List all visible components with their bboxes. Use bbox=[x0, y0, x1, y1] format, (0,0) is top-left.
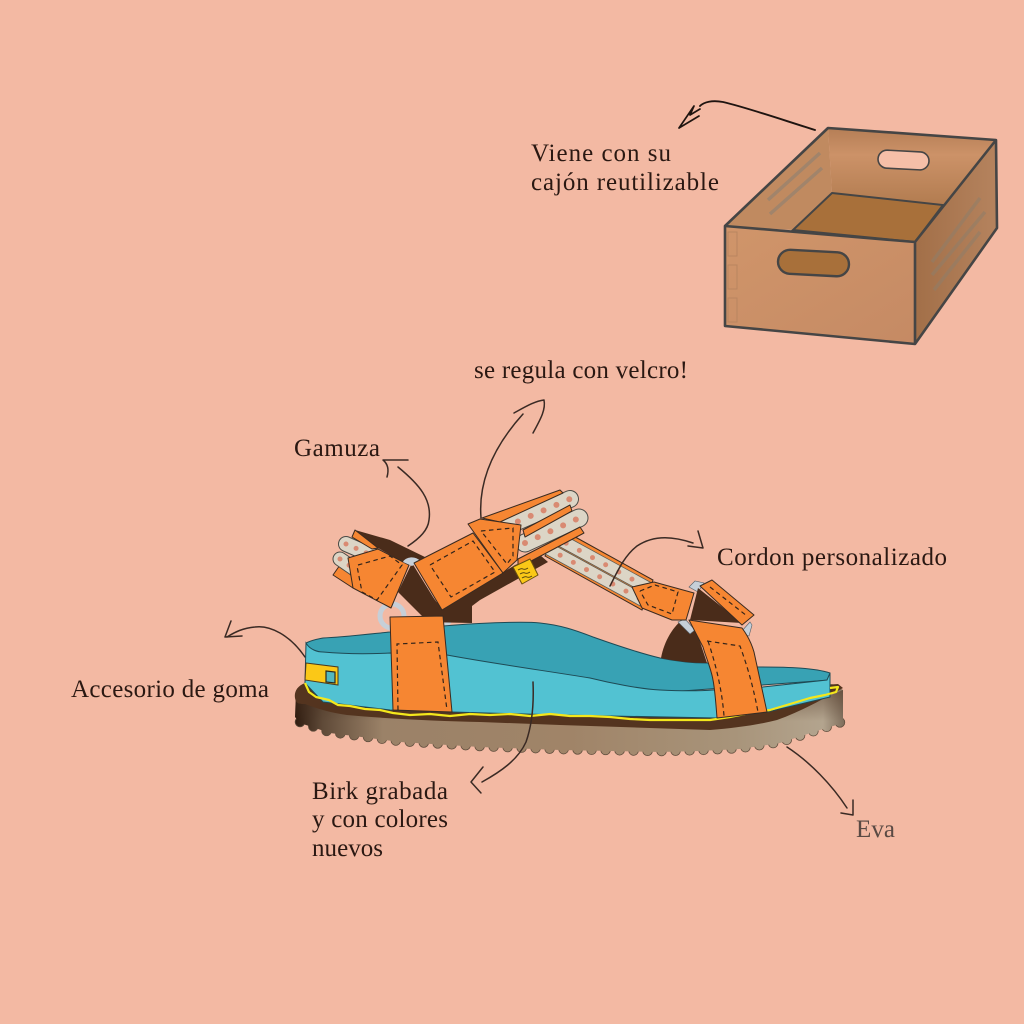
footbed bbox=[306, 622, 830, 700]
top velcro pad bbox=[468, 519, 521, 573]
front rings bbox=[678, 581, 752, 636]
crate joints bbox=[728, 232, 737, 322]
crate left inner wall bbox=[725, 128, 832, 230]
label: eva: Eva bbox=[856, 816, 895, 843]
crate front bbox=[725, 226, 915, 344]
crate front handle hole bbox=[777, 249, 850, 277]
label: birk bbox=[312, 778, 448, 862]
yellow stitch bbox=[305, 683, 838, 720]
dark straps bbox=[355, 530, 427, 565]
label: velcro: se regula con velcro! bbox=[474, 357, 688, 384]
heel strap bbox=[390, 616, 452, 712]
arrow: eva bbox=[787, 747, 853, 815]
arrow: birk bbox=[471, 682, 533, 793]
center ring bbox=[403, 557, 420, 566]
midsole bbox=[305, 643, 830, 718]
label: accesorio: Accesorio de goma bbox=[71, 676, 269, 703]
label: birk: Birk grabada bbox=[312, 778, 448, 805]
front dark arch bbox=[661, 620, 707, 663]
sole bbox=[295, 683, 843, 752]
arrow: cordon bbox=[610, 531, 703, 586]
front cords bbox=[545, 533, 653, 610]
sole teeth bbox=[300, 722, 841, 751]
crate right side bbox=[915, 140, 997, 344]
label: gamuza: Gamuza bbox=[294, 435, 380, 462]
crate outline bbox=[725, 128, 997, 344]
left cords bbox=[333, 530, 378, 588]
rubber accessory bbox=[305, 663, 338, 685]
crate right slats bbox=[932, 198, 985, 290]
front dark triangle bbox=[690, 588, 742, 623]
arrow: crate bbox=[679, 101, 815, 130]
front strap bbox=[689, 620, 767, 718]
arrow: accesorio bbox=[225, 621, 305, 657]
sandal bbox=[295, 490, 843, 752]
sole top band bbox=[295, 683, 843, 730]
label: birk: y con colores bbox=[312, 806, 448, 833]
yellow brand tag bbox=[513, 559, 538, 584]
sole shading bbox=[295, 690, 843, 752]
label: crate bbox=[531, 140, 719, 196]
back straps behind bbox=[355, 530, 548, 628]
label: crate: cajón reutilizable bbox=[531, 169, 719, 196]
rings bbox=[380, 604, 404, 628]
top cords bbox=[482, 490, 584, 568]
crate back handle hole bbox=[878, 150, 929, 170]
label: crate: Viene con su bbox=[531, 140, 672, 167]
label: birk: nuevos bbox=[312, 835, 383, 862]
label: cordon: Cordon personalizado bbox=[717, 544, 947, 571]
crate floor bbox=[793, 193, 943, 242]
left velcro pad bbox=[348, 549, 409, 608]
front pad bbox=[632, 582, 694, 620]
arrow: gamuza bbox=[383, 460, 429, 546]
icon: wooden crate bbox=[725, 128, 997, 344]
crate back wall bbox=[828, 128, 996, 205]
crate wall slats bbox=[768, 153, 822, 214]
arrow: velcro bbox=[481, 400, 544, 518]
center velcro pad bbox=[414, 533, 503, 610]
front upper pad bbox=[700, 580, 754, 625]
